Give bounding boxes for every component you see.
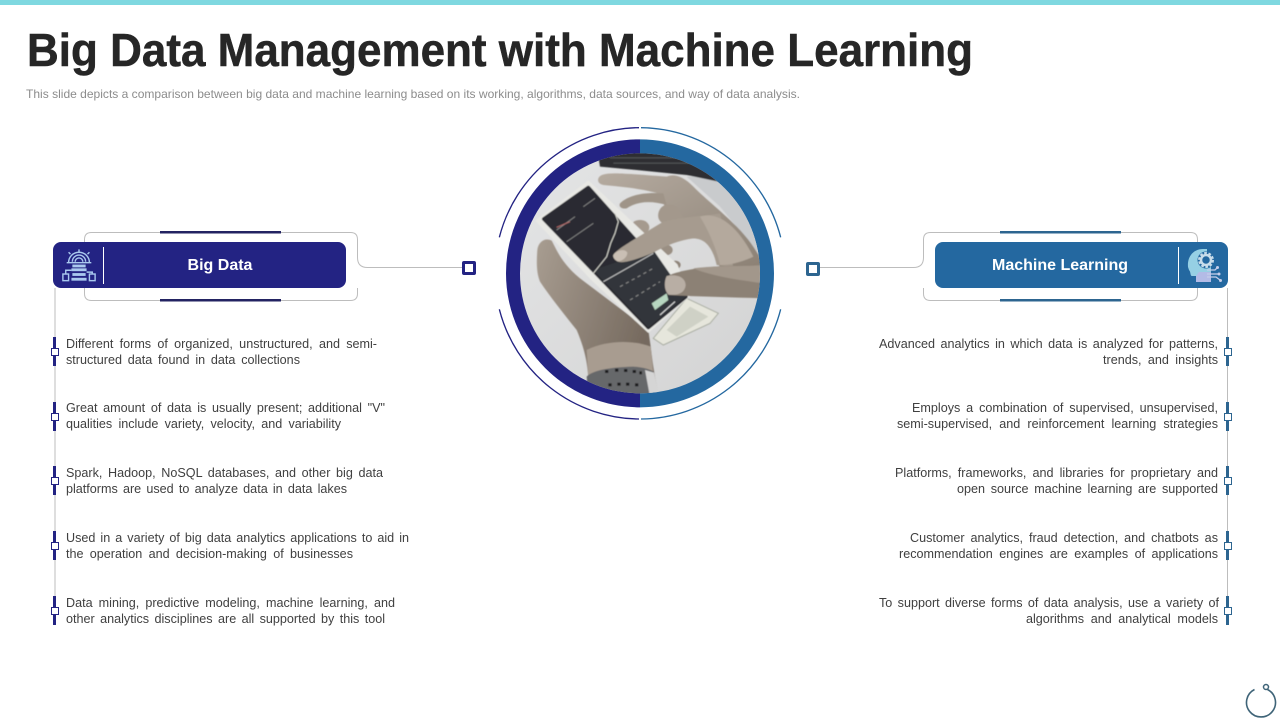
right hand: top finger and back — [598, 173, 763, 270]
bullet 4 — [53, 531, 56, 560]
connector node: Big Data — [462, 261, 476, 275]
outer arc: navy — [499, 128, 639, 419]
connector frame: Machine Learning — [820, 231, 1228, 596]
icon: AI head with gear — [1188, 249, 1222, 282]
text: point 1 — [879, 337, 1218, 367]
title: Big Data Management with Machine Learning — [27, 24, 973, 76]
text: point 2: Great amount of data is usually present; additional "V" — [66, 401, 385, 415]
bullet 1 — [1226, 337, 1229, 366]
text: point 5: other analytics disciplines are all supported by this tool — [66, 612, 385, 626]
bullet 3 — [1226, 466, 1229, 495]
icon: data server gear — [62, 249, 96, 282]
text: point 2 — [897, 401, 1218, 431]
bullet 2 — [1226, 402, 1229, 431]
text: point 5 — [66, 596, 395, 626]
list: Machine Learning points — [879, 337, 1232, 626]
banknotes — [653, 298, 718, 345]
text: point 2: qualities include variety, velocity, and variability — [66, 417, 341, 431]
text: point 5 — [879, 596, 1219, 626]
bullet 5 — [1226, 596, 1229, 625]
bullet 3 — [53, 466, 56, 495]
text: point 1: Different forms of organized, unstructured, and semi- — [66, 337, 377, 351]
text: point 3 — [895, 466, 1218, 496]
button: Machine Learning — [935, 242, 1228, 288]
text: point 4: Customer analytics, fraud detection, and chatbots as — [910, 531, 1218, 545]
text: point 1: Advanced analytics in which data is analyzed for patterns, — [879, 337, 1218, 351]
connector frame: Big Data — [54, 231, 462, 596]
knuckle highlight — [700, 215, 753, 265]
text: point 5: To support diverse forms of data analysis, use a variety of — [879, 596, 1219, 610]
list: Big Data points — [51, 337, 409, 626]
top accent bar — [0, 0, 1280, 5]
text: point 1 — [66, 337, 377, 367]
left hand fingers behind phone — [632, 220, 650, 234]
panel: central photo circle — [498, 127, 782, 420]
thumb — [664, 268, 760, 299]
outer arc: blue — [641, 128, 781, 419]
text: point 4 — [899, 531, 1218, 561]
ring left half — [513, 147, 640, 400]
subtitle: This slide depicts a comparison between big data and machine learning based on its working, algorithms, data sources, and way of data analysis. — [26, 87, 800, 101]
text: point 1: structured data found in data collections — [66, 353, 300, 367]
text: point 4 — [66, 531, 409, 561]
tucked finger — [620, 193, 667, 209]
bullet 4 — [1226, 531, 1229, 560]
ring right half — [640, 147, 767, 400]
stock chart line — [593, 213, 618, 273]
text: point 3: platforms are used to analyze data in data lakes — [66, 482, 347, 496]
text: point 5: Data mining, predictive modeling, machine learning, and — [66, 596, 395, 610]
left hand and wrist — [536, 239, 656, 376]
connector node: Machine Learning — [806, 262, 820, 276]
buy button — [652, 293, 668, 310]
text: point 1: trends, and insights — [1103, 353, 1218, 367]
button: Big Data — [53, 242, 346, 288]
button label: Big Data — [188, 257, 252, 274]
text: point 3: Platforms, frameworks, and libraries for proprietary and — [895, 466, 1218, 480]
bullet 5 — [53, 596, 56, 625]
bullet 2 — [53, 402, 56, 431]
keyboard — [597, 147, 720, 182]
pointing finger — [613, 213, 733, 267]
text: point 4: the operation and decision-making of businesses — [66, 547, 353, 561]
text: point 2 — [66, 401, 385, 431]
watch — [587, 367, 658, 395]
divider — [1178, 247, 1179, 284]
text: point 2: semi-supervised, and reinforcement learning strategies — [897, 417, 1218, 431]
divider — [103, 247, 104, 284]
text: point 4: Used in a variety of big data analytics applications to aid in — [66, 531, 409, 545]
panel: Machine Learning — [806, 231, 1228, 596]
text: point 3 — [66, 466, 383, 496]
tucked finger 2 — [658, 205, 668, 223]
icon: corner refresh logo — [1246, 684, 1276, 718]
tabletop shade — [688, 175, 758, 254]
text: point 5: algorithms and analytical models — [1026, 612, 1218, 626]
thumb nail — [665, 275, 686, 295]
phone case — [537, 182, 688, 332]
text: point 3: open source machine learning are supported — [957, 482, 1218, 496]
text: point 3: Spark, Hadoop, NoSQL databases, and other big data — [66, 466, 383, 480]
photo: hands holding phone — [517, 147, 763, 397]
text: point 2: Employs a combination of supervised, unsupervised, — [912, 401, 1218, 415]
phone screen — [544, 188, 686, 327]
button label: Machine Learning — [992, 257, 1128, 274]
text: point 4: recommendation engines are examples of applications — [899, 547, 1218, 561]
bullet 1 — [53, 337, 56, 366]
panel: Big Data — [53, 231, 476, 596]
pointing nail — [613, 250, 627, 261]
